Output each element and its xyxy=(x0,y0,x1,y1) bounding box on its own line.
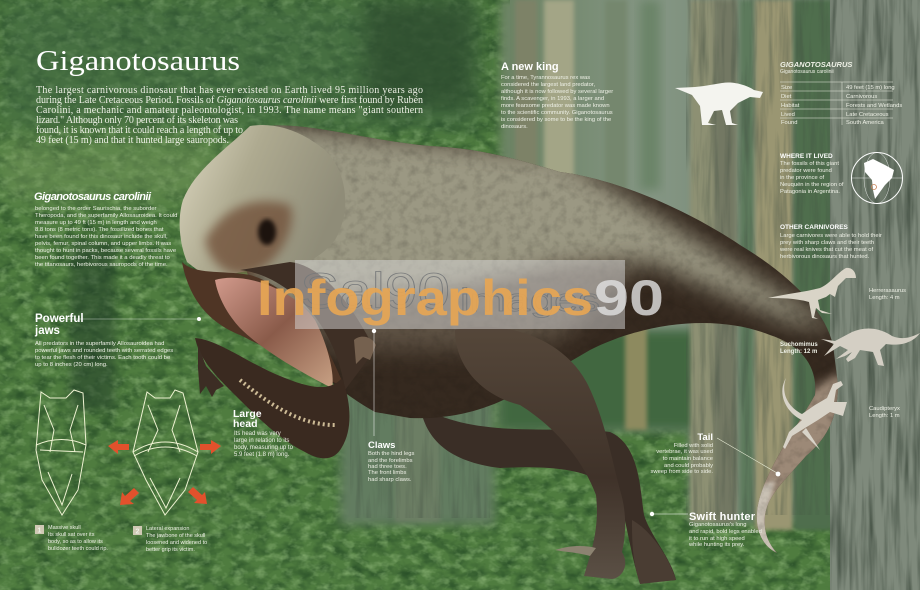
other carnivores text: were real knives that cut the meat of xyxy=(779,247,874,253)
step 2: lateral expansion: better grip its victim. xyxy=(146,547,195,553)
right trunk xyxy=(830,0,920,590)
callout: claws: had sharp claws. xyxy=(368,477,412,483)
callout: tail: to maintain balance xyxy=(663,456,713,462)
label: herrerasaurus: Length: 4 m xyxy=(869,295,900,301)
central trunk xyxy=(340,390,495,525)
callout: a new king: to the scientific community. Giganotosaurus xyxy=(501,110,613,116)
callout: powerful jaws: up to 8 inches (20 cm) long. xyxy=(35,362,108,368)
callout: powerful jaws: to tear the flesh of their victims. Each tooth could be xyxy=(35,355,171,361)
callout: powerful jaws: jaws xyxy=(34,325,60,337)
callout: a new king: considered the largest land predator, xyxy=(501,82,595,88)
data table: giganotosaurus: GIGANOTOSAURUS xyxy=(780,60,852,69)
watermark: images xyxy=(460,282,600,318)
far hind leg xyxy=(420,405,676,583)
body and tail xyxy=(230,110,850,560)
data table: giganotosaurus: Giganotosaurus carolinii xyxy=(780,69,834,75)
callout: large head: 5.9 feet (1.8 m) long. xyxy=(234,452,290,458)
where it lived text: in the province of xyxy=(780,175,825,181)
arm near xyxy=(354,337,376,364)
callout: tail xyxy=(650,432,780,476)
near hind leg xyxy=(455,327,625,579)
callout: swift hunter: while hunting its prey. xyxy=(688,542,745,548)
dinosaur illustration: Giganotosaurus xyxy=(180,110,850,584)
callout: tail: and could probably xyxy=(664,463,713,469)
watermark: Infographics xyxy=(257,270,593,326)
species heading and text: have been found for this dinosaur include the skull, xyxy=(35,234,168,240)
step 2: lateral expansion: 2 xyxy=(136,528,140,536)
icon: giganotosaurus silhouette xyxy=(675,83,763,125)
callout: claws xyxy=(368,329,415,483)
callout: a new king: is considered by some to be the king of the xyxy=(501,117,611,123)
arrows: jaw expansion xyxy=(108,440,221,505)
callout: swift hunter: and rapid, bold legs enabled xyxy=(689,529,762,535)
intro text block: during the Late Cretaceous Period. Fossils of Giganotosaurus carolinii were first found by Rubén xyxy=(36,95,423,106)
watermark: Sal90 xyxy=(300,263,450,319)
species heading and text: Theropoda, and the superfamily Allosauroidea. It could xyxy=(35,213,177,219)
data table: giganotosaurus: 49 feet (15 m) long xyxy=(846,85,895,91)
step 1: massive skull: 1 xyxy=(38,528,42,534)
other carnivores text: OTHER CARNIVORES xyxy=(780,224,849,231)
data table: giganotosaurus: Forests and Wetlands xyxy=(846,103,902,109)
step 1: massive skull: Massive skull xyxy=(48,525,81,531)
intro text block: The largest carnivorous dinosaur that has ever existed on Earth lived 95 million years ago xyxy=(36,85,423,96)
intro text block: found, it is known that it could reach a length of up to xyxy=(36,125,243,136)
callout: claws: and the forelimbs xyxy=(368,458,413,464)
callout: large head: Large xyxy=(233,408,262,420)
data table: giganotosaurus: South America xyxy=(846,120,884,126)
label: suchomimus: Length: 12 m xyxy=(780,349,817,355)
data table: giganotosaurus: Diet xyxy=(781,94,792,100)
callout: a new king: dinosaurs. xyxy=(501,124,528,130)
callout: a new king: although it is now followed by several larger xyxy=(501,89,613,95)
callout: swift hunter xyxy=(650,511,762,548)
callout: powerful jaws: Powerful xyxy=(35,313,84,325)
where it lived text: predator were found xyxy=(780,168,832,174)
callout: a new king: finds. A scavenger, in 1993, a larger and xyxy=(501,96,604,102)
intro text block xyxy=(36,85,423,146)
data table: giganotosaurus: Lived xyxy=(781,112,795,118)
other carnivores text: herbivorous dinosaurs that hunted. xyxy=(780,254,870,260)
species heading and text: Giganotosaurus carolinii xyxy=(34,191,152,203)
upper jaw xyxy=(182,262,345,388)
watermark xyxy=(257,260,664,329)
step 1: massive skull xyxy=(35,525,108,552)
species heading and text: measure up to 49 ft (15 m) in length and weigh xyxy=(35,220,157,226)
where it lived text: Patagonia in Argentina. xyxy=(780,189,840,195)
data table: giganotosaurus: Late Cretaceous xyxy=(846,112,889,118)
callout: powerful jaws: All predators in the superfamily Allosauroidea had xyxy=(35,341,164,347)
callout: large head: large in relation to its xyxy=(234,438,289,444)
label: herrerasaurus: Herrerasaurus xyxy=(869,288,906,294)
callout: tail: vertebrae, it was used xyxy=(656,449,713,455)
callout: tail: sweep from side to side. xyxy=(650,469,713,475)
callout: tail: Tail xyxy=(697,432,713,443)
species heading and text: thought to hunt in packs, because several fossils have xyxy=(35,248,177,254)
title: Giganotosaurus xyxy=(36,46,240,77)
step 1: massive skull: body, so as to allow its xyxy=(48,539,103,545)
species heading and text: the titanosaurs, herbivorous sauropods of the time. xyxy=(35,262,168,268)
species heading and text xyxy=(34,191,177,268)
callout: claws: had three toes. xyxy=(368,464,407,470)
where it lived text: Neuquén in the region of xyxy=(780,182,844,188)
misty background region xyxy=(500,0,830,522)
data table: giganotosaurus: Habitat xyxy=(781,103,800,109)
species heading and text: 8.8 tons (8 metric tons). The fossilized bones that xyxy=(35,227,164,233)
callout: large head: body, measuring up to xyxy=(234,445,294,451)
silhouette: herrerasaurus xyxy=(768,268,856,319)
callout: swift hunter: Swift hunter xyxy=(689,511,756,523)
callout: a new king xyxy=(501,61,613,130)
where it lived text: The fossils of this giant xyxy=(780,161,839,167)
callout: a new king: A new king xyxy=(501,61,559,73)
intro text block: lizard." Although only 70 percent of its skeleton was xyxy=(36,115,238,126)
callout: claws: The front limbs xyxy=(368,470,406,476)
callout: swift hunter: Giganotosaurus's long xyxy=(689,522,747,528)
callout: a new king: For a time, Tyrannosaurus rex was xyxy=(501,75,590,81)
callout: powerful jaws xyxy=(34,313,201,368)
step 2: lateral expansion: The jawbone of the skull xyxy=(146,533,205,539)
globe map: South America xyxy=(852,152,902,204)
other carnivores text xyxy=(779,224,882,260)
skull line drawing 2 xyxy=(133,390,198,515)
step 2: lateral expansion xyxy=(133,526,207,553)
step 2: lateral expansion: loosened and widened to xyxy=(146,540,207,546)
label: caudipteryx: Caudipteryx xyxy=(869,406,900,412)
callout: swift hunter: it to run at high speed xyxy=(689,536,745,542)
callout: a new king: more fearsome predator was made known xyxy=(501,103,610,109)
lower jaw xyxy=(195,338,350,458)
data table: giganotosaurus: Found xyxy=(781,120,797,126)
species heading and text: belonged to the order Saurischia, the suborder xyxy=(35,206,157,212)
skull line drawing 1 xyxy=(36,390,86,515)
where it lived text: WHERE IT LIVED xyxy=(780,153,833,160)
intro text block: Carolini, a mechanic and amateur paleontologist, in 1993. The name means "giant southern xyxy=(36,105,423,116)
intro text block: 49 feet (15 m) and that it hunted large sauropods. xyxy=(36,135,229,146)
arm left xyxy=(198,345,224,397)
species heading and text: been found together. This made it a deadly threat to xyxy=(35,255,171,261)
step 2: lateral expansion: Lateral expansion xyxy=(146,526,189,532)
species heading and text: pelvis, femur, spinal column, and upper limbs. It was xyxy=(35,241,171,247)
callout: powerful jaws: powerful jaws and rounded teeth with serrated edges xyxy=(35,348,173,354)
label: suchomimus: Suchomimus xyxy=(780,342,818,348)
data table: giganotosaurus: Carnivorous xyxy=(846,94,877,100)
other carnivores text: Large carnivores were able to hold their xyxy=(780,233,882,239)
callout: claws: Claws xyxy=(368,440,395,451)
head xyxy=(180,125,345,278)
callout: claws: Both the hind legs xyxy=(368,451,415,457)
callout: large head: Its head was very xyxy=(234,431,281,437)
label: caudipteryx: Length: 1 m xyxy=(869,413,900,419)
data table: giganotosaurus: Size xyxy=(781,85,792,91)
mouth interior xyxy=(215,278,333,388)
data table: giganotosaurus xyxy=(780,60,902,126)
step 1: massive skull: bulldozer teeth could rip. xyxy=(48,546,108,552)
step 1: massive skull: Its skull sat over its xyxy=(48,532,95,538)
silhouette: suchomimus xyxy=(821,329,920,366)
other carnivores text: prey with sharp claws and their teeth xyxy=(780,240,874,246)
callout: tail: Filled with solid xyxy=(674,443,713,449)
silhouette: caudipteryx xyxy=(782,378,847,450)
callout: large head: head xyxy=(233,418,258,430)
where it lived text xyxy=(780,153,844,195)
callout: large head xyxy=(233,408,294,458)
watermark: 90 xyxy=(594,270,664,326)
